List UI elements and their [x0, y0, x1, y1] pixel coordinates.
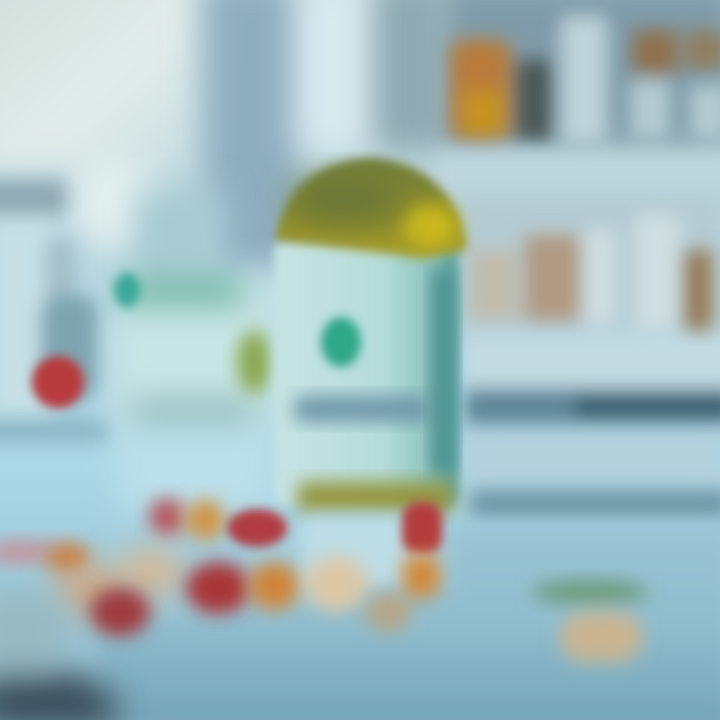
right edge of label [432, 270, 454, 475]
bottle base [300, 515, 430, 585]
main bottle [274, 158, 467, 585]
label band [295, 396, 430, 422]
middle bottle [112, 190, 277, 510]
bottle body [274, 240, 458, 505]
bottle bottom band [298, 482, 453, 514]
counter [100, 525, 720, 720]
shelf planks [435, 152, 720, 518]
shelf bottles middle [470, 215, 712, 330]
back column [205, 0, 445, 270]
green label dot [321, 317, 361, 367]
foreground dark object [0, 590, 120, 720]
window glow [0, 0, 195, 250]
left jar [0, 180, 110, 443]
shelf bottles top [450, 15, 720, 145]
red pill on jar [32, 356, 84, 408]
leaf and capsule on counter [532, 579, 648, 662]
right shelves [435, 0, 720, 518]
bottle cap [275, 158, 467, 258]
pills [0, 498, 442, 636]
shelf backdrop [440, 0, 720, 495]
